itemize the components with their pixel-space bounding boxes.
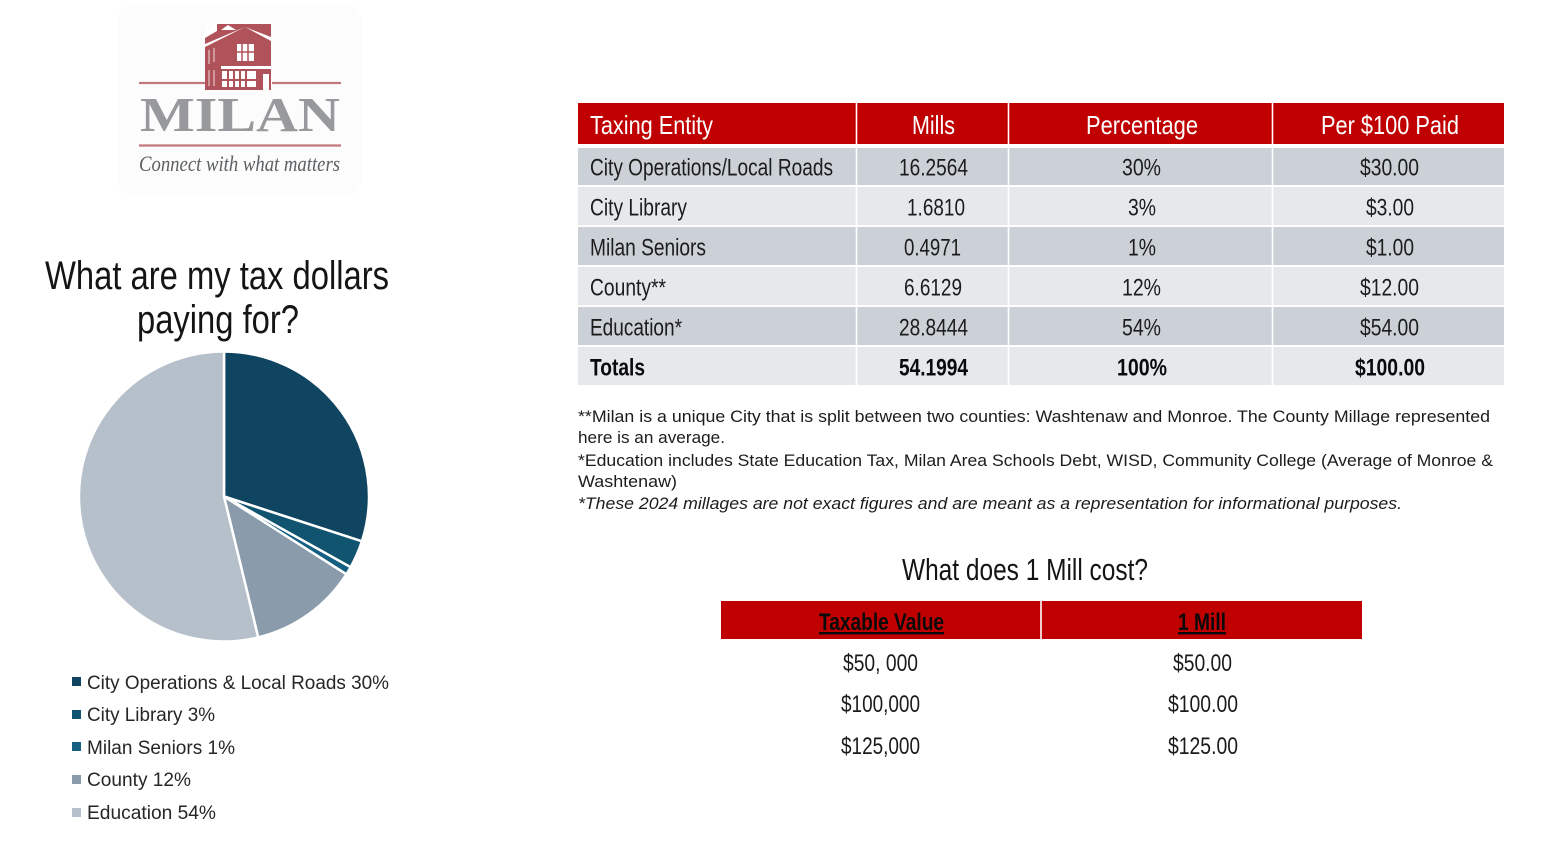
mill table header: Taxable Value (819, 609, 944, 636)
row: Totals: 54.1994 (899, 354, 969, 382)
row: City Operations: City Operations/Local Roads (590, 154, 833, 182)
row: Milan Seniors: $1.00 (1366, 234, 1414, 262)
row: City Library: 1.6810 (907, 194, 965, 222)
table header row (578, 103, 1504, 144)
footnotes: **Milan is a unique City that is split between two counties: Washtenaw and Monroe. The County Millage represented (578, 407, 1490, 426)
logo tagline: Connect with what matters (139, 151, 340, 176)
table row backgrounds (578, 103, 1504, 385)
footnotes (578, 407, 1494, 513)
row: Milan Seniors: Milan Seniors (590, 234, 706, 262)
row: Milan Seniors: 1% (1128, 234, 1156, 262)
table header row: Per $100 Paid (1321, 110, 1459, 140)
row: County (590, 274, 1419, 302)
chart legend: City Operations & Local Roads 30% (87, 673, 389, 694)
row: City Library: $3.00 (1366, 194, 1414, 222)
row: Totals: $100.00 (1355, 354, 1425, 382)
footnotes: *These 2024 millages are not exact figures and are meant as a representation for informational purposes. (578, 494, 1402, 513)
row: City Operations (590, 154, 1419, 182)
logo wordmark: MILAN (140, 87, 340, 142)
row: County: $12.00 (1360, 274, 1419, 302)
row: Education: 28.8444 (899, 314, 968, 342)
chart legend: Milan Seniors 1% (87, 738, 235, 759)
row: Education (590, 314, 1419, 342)
pie chart (79, 352, 369, 642)
heading: mill cost: What does 1 Mill cost? (902, 552, 1148, 587)
chart title: What are my tax dollars (45, 254, 389, 298)
table: mill cost (721, 601, 1362, 760)
row: Milan Seniors (590, 234, 1414, 262)
table header row: Percentage (1086, 110, 1198, 140)
row: Education: $54.00 (1360, 314, 1419, 342)
mill row 50,000: $50, 000 (843, 650, 918, 677)
row: Totals: 100% (1117, 354, 1167, 382)
mill row 100,000: $100,000 (841, 691, 920, 718)
footnotes: *Education includes State Education Tax, Milan Area Schools Debt, WISD, Community College (Average of Monroe & (578, 451, 1494, 470)
row: City Operations: 16.2564 (899, 154, 968, 182)
row: City Operations: 30% (1122, 154, 1161, 182)
chart legend: County 12% (87, 770, 191, 791)
row: Milan Seniors: 0.4971 (904, 234, 961, 262)
chart title (45, 254, 389, 342)
footnotes: Washtenaw) (578, 472, 677, 491)
mill row 50,000: $50.00 (1173, 650, 1232, 677)
table header row: Mills (912, 110, 955, 140)
row: Education: Education* (590, 314, 682, 342)
mill row 100,000 (841, 691, 1238, 718)
chart title: paying for? (137, 298, 299, 342)
mill row 125,000 (841, 733, 1238, 760)
row: City Library: City Library (590, 194, 687, 222)
mill table header (721, 601, 1362, 639)
row: County: County** (590, 274, 666, 302)
mill row 50,000 (843, 650, 1232, 677)
footnotes: here is an average. (578, 428, 725, 447)
row: Totals (590, 354, 1425, 382)
mill row 125,000: $125.00 (1168, 733, 1238, 760)
row: County: 6.6129 (904, 274, 962, 302)
mill table header: 1 Mill (1178, 609, 1226, 636)
chart legend (72, 673, 389, 824)
table header row: Taxing Entity (590, 110, 713, 140)
mill row 125,000: $125,000 (841, 733, 920, 760)
row: Totals: Totals (590, 354, 645, 382)
icon: house (205, 24, 271, 90)
row: Education: 54% (1122, 314, 1161, 342)
row: County: 12% (1122, 274, 1161, 302)
row: City Operations: $30.00 (1360, 154, 1419, 182)
row: City Library: 3% (1128, 194, 1156, 222)
chart legend: City Library 3% (87, 705, 215, 726)
table: taxing entities (578, 103, 1504, 385)
logo: City of Milan (118, 5, 361, 195)
chart legend: Education 54% (87, 803, 216, 824)
mill row 100,000: $100.00 (1168, 691, 1238, 718)
row: City Library (590, 194, 1414, 222)
